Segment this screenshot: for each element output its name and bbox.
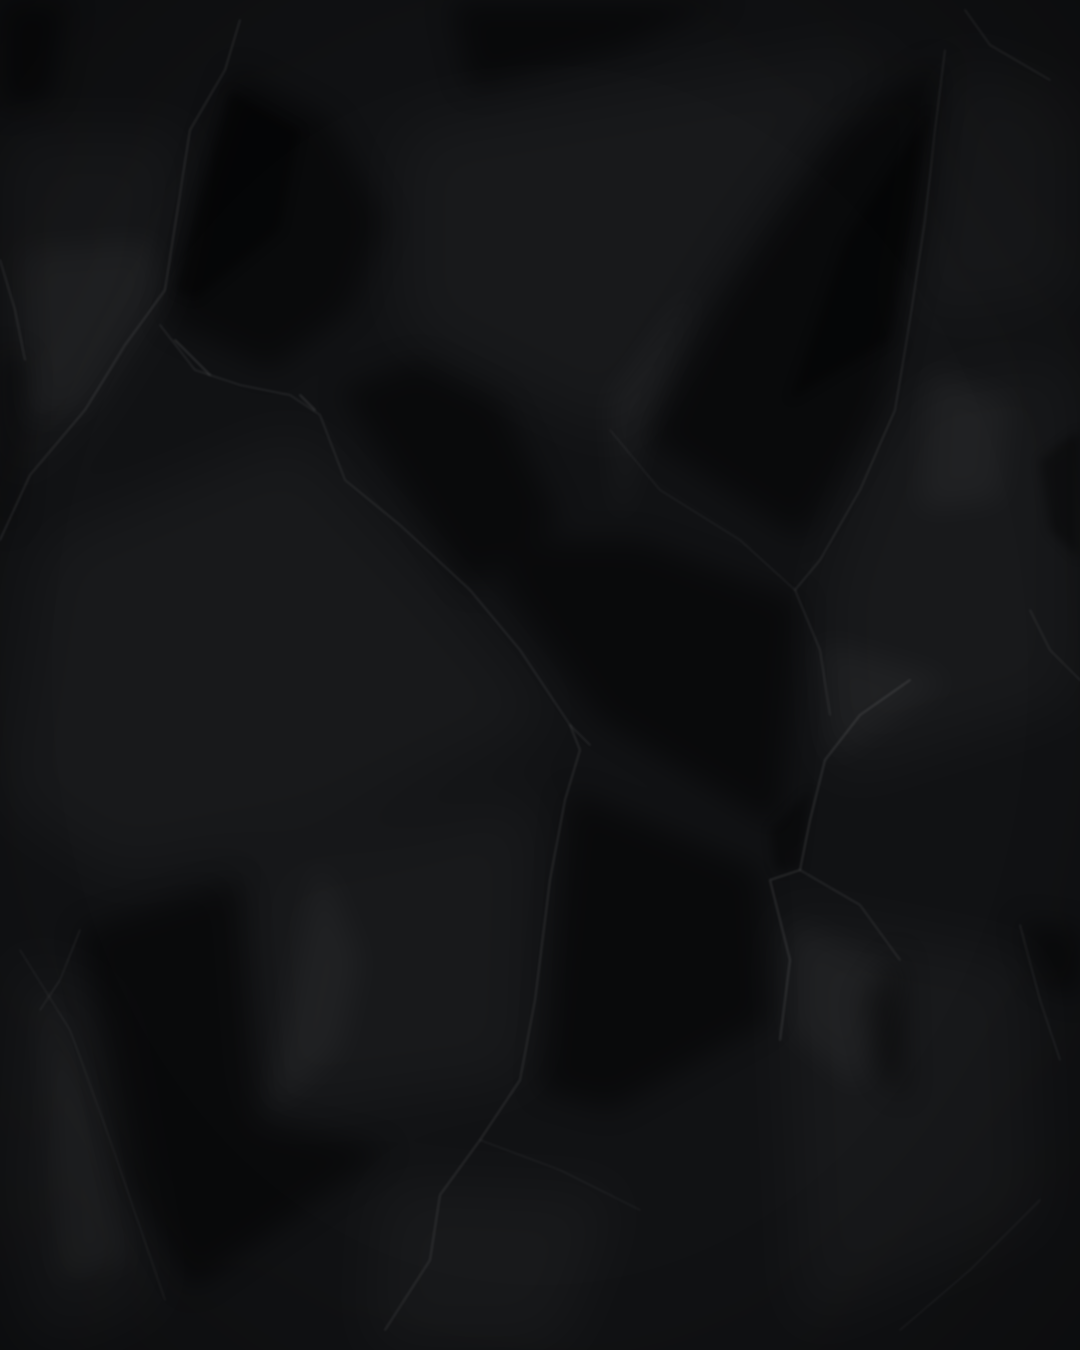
sharper light facets (20, 240, 1010, 1280)
deepest paper shadows (175, 90, 1080, 870)
